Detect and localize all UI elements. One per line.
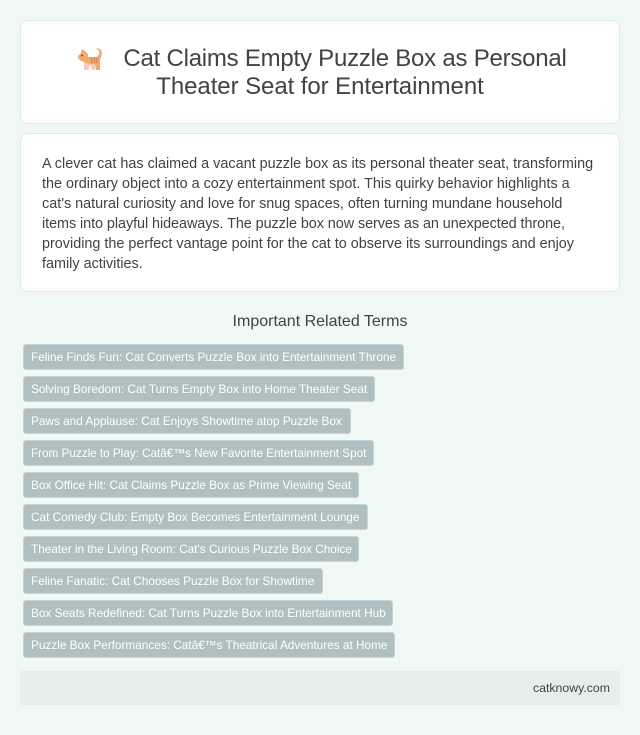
description panel: [20, 133, 620, 292]
term 10: Puzzle Box Performances: Catâ€™s Theatrical Adventures at Home: [31, 638, 387, 652]
term 1: Feline Finds Fun: Cat Converts Puzzle Box into Entertainment Throne: [31, 350, 396, 364]
term 8: [23, 568, 323, 594]
term 4: From Puzzle to Play: Catâ€™s New Favorite Entertainment Spot: [31, 446, 366, 460]
header panel: Cat Claims Empty Puzzle Box as Personal: [123, 45, 567, 72]
term 10: [23, 632, 395, 658]
icon: cat emoji: [78, 48, 102, 70]
term 1: [23, 344, 404, 370]
term 7: Theater in the Living Room: Cat's Curious Puzzle Box Choice: [31, 542, 352, 556]
term 2: Solving Boredom: Cat Turns Empty Box into Home Theater Seat: [31, 382, 367, 396]
footer text: catknowy.com: [533, 681, 610, 695]
description panel: the ordinary object into a cozy entertainment spot. This quirky behavior highlights a: [42, 176, 570, 192]
term 3: [23, 408, 351, 434]
term 5: Box Office Hit: Cat Claims Puzzle Box as Prime Viewing Seat: [31, 478, 351, 492]
term 2: [23, 376, 375, 402]
description panel: items into playful hideaways. The puzzle box now serves as an unexpected throne,: [42, 216, 565, 232]
description text: [42, 156, 593, 272]
description panel: providing the perfect vantage point for the cat to observe its surroundings and enjoy: [42, 236, 574, 252]
term 5: [23, 472, 359, 498]
footer bar: [20, 671, 620, 705]
term 3: Paws and Applause: Cat Enjoys Showtime atop Puzzle Box: [31, 414, 342, 428]
description panel: A clever cat has claimed a vacant puzzle box as its personal theater seat, transforming: [42, 156, 593, 172]
term 4: [23, 440, 374, 466]
term list: [23, 344, 404, 658]
term 7: [23, 536, 359, 562]
term 9: Box Seats Redefined: Cat Turns Puzzle Box into Entertainment Hub: [31, 606, 386, 620]
description panel: cat's natural curiosity and love for snug spaces, often turning mundane household: [42, 196, 562, 212]
term 6: [23, 504, 368, 530]
term 8: Feline Fanatic: Cat Chooses Puzzle Box for Showtime: [31, 574, 314, 588]
term 6: Cat Comedy Club: Empty Box Becomes Entertainment Lounge: [31, 510, 360, 524]
header panel: Theater Seat for Entertainment: [156, 73, 484, 100]
description panel: family activities.: [42, 256, 143, 272]
term 9: [23, 600, 393, 626]
related terms heading: Important Related Terms: [233, 313, 407, 330]
header panel: [20, 20, 620, 124]
title: [123, 45, 567, 100]
